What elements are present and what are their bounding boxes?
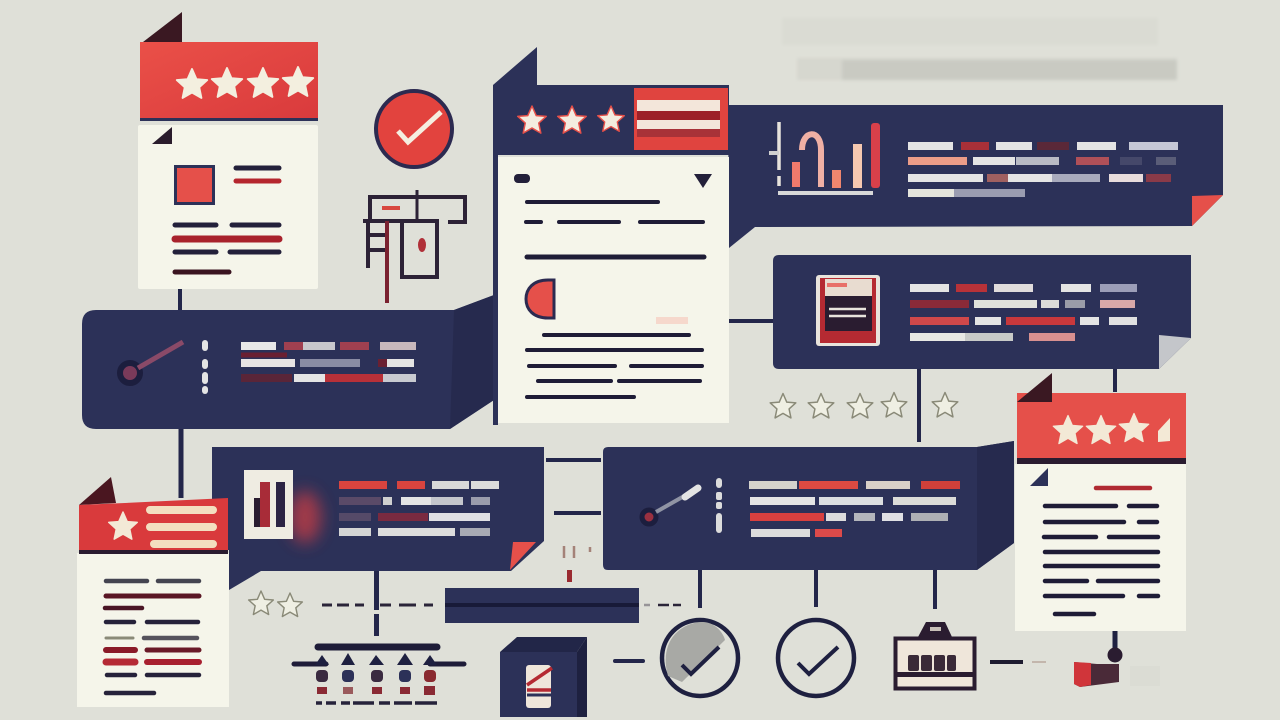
rating header bbox=[79, 498, 228, 554]
blurred ghost title bbox=[782, 18, 1177, 80]
text lines bbox=[105, 581, 199, 693]
paper bbox=[77, 553, 229, 707]
text lines bbox=[1044, 488, 1158, 614]
image square bbox=[176, 166, 214, 204]
icon: gauge check bbox=[120, 342, 183, 383]
icon: gauge check bbox=[642, 487, 700, 524]
rating stars outline lower bbox=[249, 591, 302, 617]
semicircle icon bbox=[526, 280, 554, 318]
flag bbox=[143, 12, 182, 42]
paper bbox=[138, 125, 318, 289]
panel: top right chart bbox=[728, 105, 1223, 248]
text bars bbox=[749, 485, 960, 533]
panel fold bbox=[1159, 335, 1191, 369]
icon: red check badge bbox=[376, 91, 452, 167]
dotted divider bbox=[202, 340, 208, 394]
icon: sketch tool bbox=[363, 190, 465, 303]
dashed line left bbox=[322, 604, 433, 606]
red glow bbox=[289, 491, 321, 543]
text bars bbox=[241, 346, 416, 393]
connector lines bbox=[180, 289, 1115, 661]
panel: lower left chart bbox=[212, 447, 544, 590]
corner marks bbox=[514, 174, 712, 188]
paper bbox=[498, 157, 729, 423]
panel side bbox=[450, 295, 494, 429]
corner mark bbox=[1030, 468, 1048, 486]
panel fold bbox=[1192, 195, 1223, 226]
document: right bbox=[1015, 373, 1186, 631]
header bbox=[493, 85, 729, 425]
corner mark bbox=[152, 127, 172, 144]
icon: pin with red block bbox=[1074, 631, 1160, 687]
flag bbox=[493, 47, 537, 85]
document: centre bbox=[493, 47, 729, 425]
faint pink note bbox=[656, 317, 688, 324]
icon: hanging row bbox=[294, 647, 464, 703]
rating stars outline upper bbox=[770, 392, 958, 418]
dotted divider bbox=[716, 478, 722, 533]
text bars bbox=[908, 146, 1178, 193]
document: bottom left bbox=[77, 477, 229, 707]
document: top left bbox=[138, 12, 318, 289]
panel fold bbox=[510, 542, 536, 570]
icon: camera bbox=[896, 622, 974, 688]
flag bbox=[79, 477, 116, 505]
rating header bbox=[140, 42, 318, 121]
rating header bbox=[1017, 373, 1186, 464]
dashed line right bbox=[644, 604, 681, 606]
panel: middle right bbox=[773, 255, 1191, 369]
icon: navy cube bbox=[500, 637, 587, 717]
icon: phone card bbox=[816, 275, 880, 346]
bar chart icon bbox=[769, 122, 880, 193]
icon: check circle bbox=[778, 620, 854, 696]
text lines bbox=[175, 168, 279, 272]
icon: chart card bbox=[244, 470, 293, 539]
panel: middle left bbox=[82, 295, 494, 429]
panel side bbox=[977, 441, 1014, 570]
panel: lower right bbox=[603, 441, 1014, 570]
text bars bbox=[339, 485, 499, 532]
small glyph marks bbox=[564, 546, 590, 582]
text bars bbox=[910, 288, 1137, 337]
text lines bbox=[526, 202, 704, 397]
paper bbox=[1015, 464, 1186, 631]
dark bar bbox=[445, 588, 639, 623]
icon: check circle shaded bbox=[662, 620, 738, 696]
dash after camera bbox=[990, 660, 1046, 664]
